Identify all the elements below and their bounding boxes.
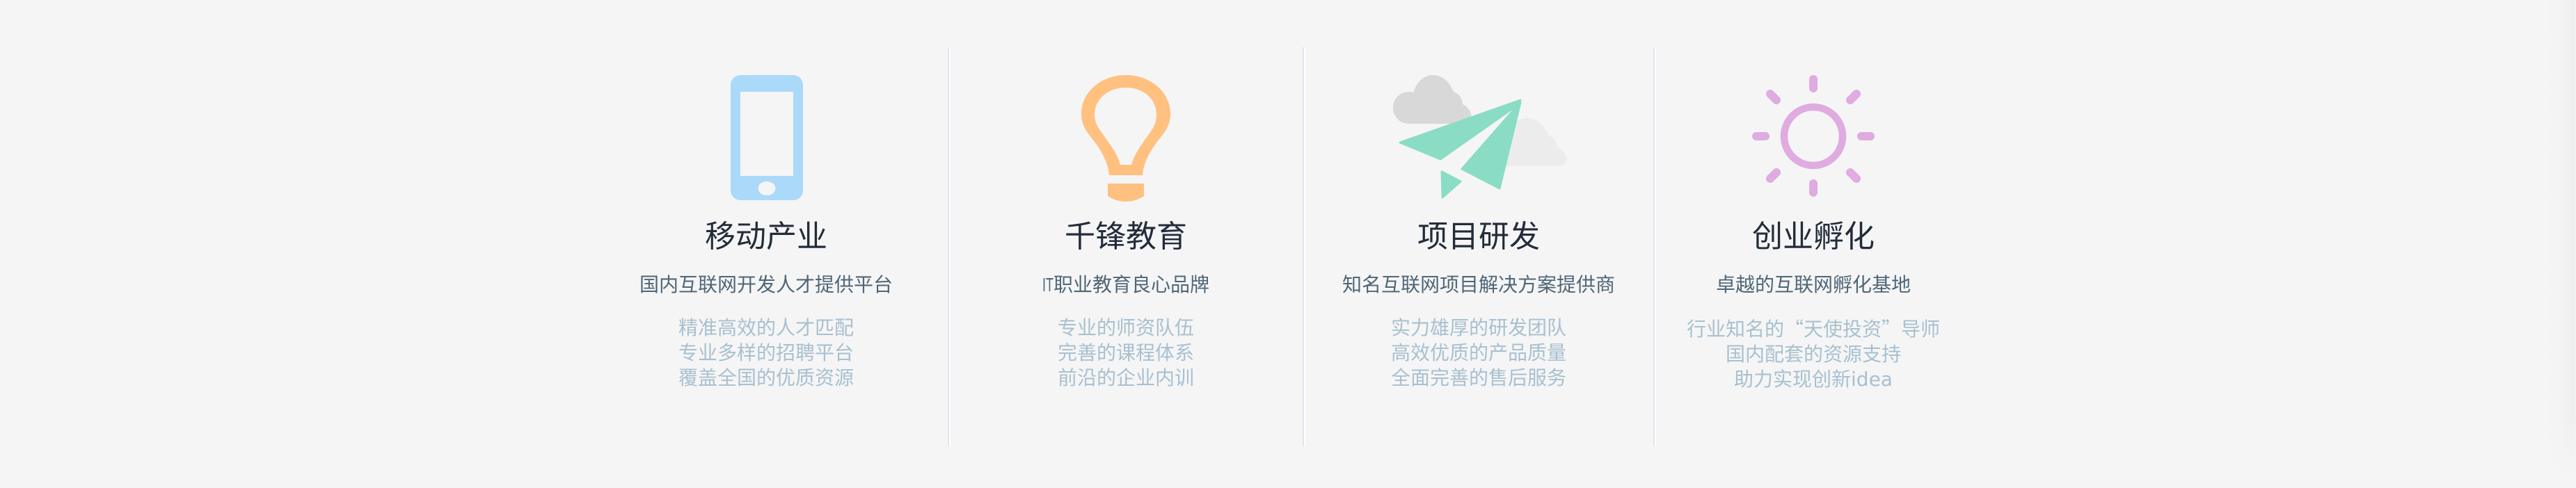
heading: 项目研发 bbox=[1417, 220, 1540, 254]
subtitle: IT bbox=[1042, 274, 1054, 295]
description list: 助力实现创新idea bbox=[1734, 368, 1893, 391]
description list: 实力雄厚的研发团队 bbox=[1391, 317, 1566, 339]
heading: 创业孵化 bbox=[1752, 220, 1875, 254]
panel: 创业孵化 bbox=[1687, 220, 1940, 391]
panel: 项目研发 bbox=[1342, 220, 1615, 389]
subtitle: 卓越的互联网孵化基地 bbox=[1716, 274, 1911, 295]
description list: 全面完善的售后服务 bbox=[1391, 367, 1566, 389]
description list: 专业的师资队伍 bbox=[1058, 317, 1194, 339]
panel: 移动产业 bbox=[639, 220, 893, 389]
heading: 千锋教育 bbox=[1065, 220, 1187, 254]
icon: paper plane and clouds bbox=[1393, 75, 1567, 197]
description list bbox=[678, 317, 854, 389]
description list: 专业多样的招聘平台 bbox=[678, 342, 854, 364]
panel: 千锋教育 bbox=[1042, 220, 1209, 389]
description list: 完善的课程体系 bbox=[1058, 342, 1194, 364]
description list: 前沿的企业内训 bbox=[1058, 367, 1194, 389]
description list: 国内配套的资源支持 bbox=[1726, 343, 1901, 365]
subtitle: 知名互联网项目解决方案提供商 bbox=[1342, 274, 1615, 295]
icon: light bulb bbox=[1081, 75, 1170, 202]
description list bbox=[1391, 317, 1566, 389]
icon: sun bbox=[1756, 79, 1870, 193]
description list bbox=[1058, 317, 1194, 389]
description list: 覆盖全国的优质资源 bbox=[678, 367, 854, 389]
icon: smartphone bbox=[731, 75, 803, 200]
description list: 行业知名的“天使投资”导师 bbox=[1687, 314, 1940, 342]
heading: 移动产业 bbox=[705, 220, 827, 254]
description list bbox=[1687, 314, 1940, 391]
subtitle: 国内互联网开发人才提供平台 bbox=[639, 274, 893, 295]
subtitle: 职业教育良心品牌 bbox=[1054, 274, 1209, 295]
description list: 高效优质的产品质量 bbox=[1391, 342, 1566, 364]
description list: 精准高效的人才匹配 bbox=[678, 317, 854, 339]
